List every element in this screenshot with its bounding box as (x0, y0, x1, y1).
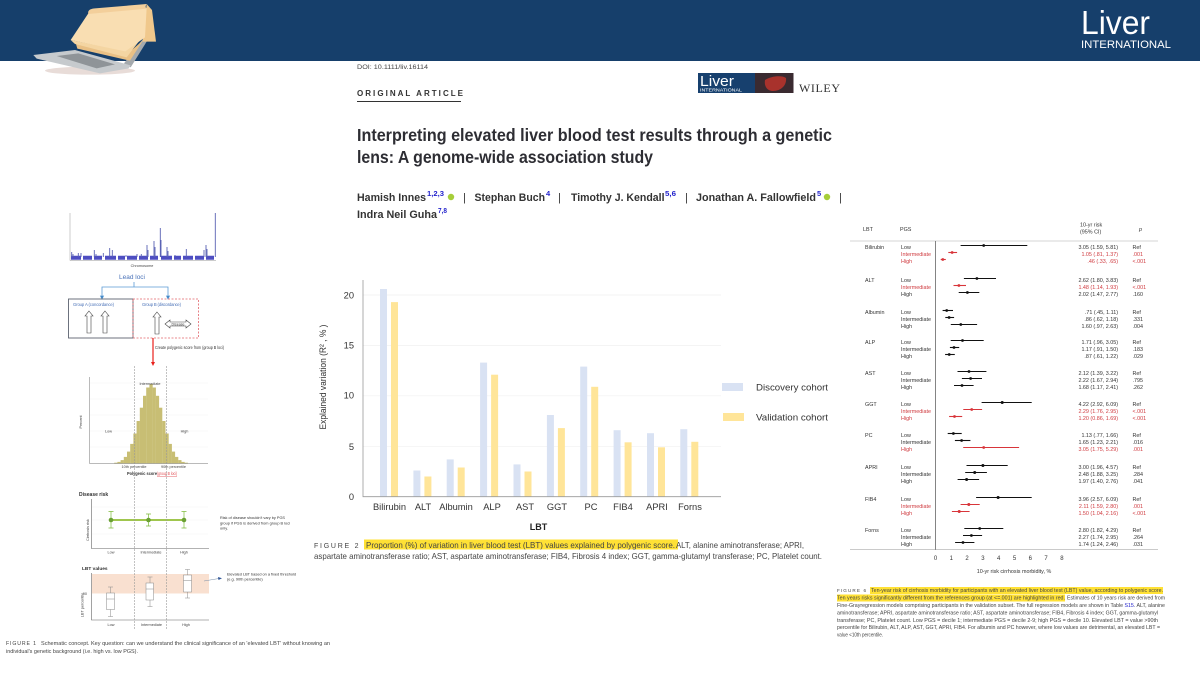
group: ALP: Low (901, 340, 911, 346)
group: Bilirubin: 3.05 (1.59, 5.81) (1078, 245, 1118, 251)
y axis title: Explained variation (R² , % ) (318, 324, 329, 430)
box: group B discordance (133, 299, 198, 338)
table header (863, 222, 1142, 236)
group: ALP: .183 (1132, 347, 1143, 353)
chart: manhattan plot (70, 213, 216, 268)
group: APRI: APRI (865, 465, 878, 471)
forest plot x axis: 5 (1013, 556, 1017, 562)
chart: polygenic score histogram: Low (105, 430, 112, 434)
chart: disease risk: Intermediate (140, 550, 162, 554)
caption: figure 2: Proportion (%) of variation in liver blood test (LBT) values explained by polygenic score. (366, 540, 675, 550)
group: Albumin: .71 (.45, 1.11) (1085, 310, 1118, 316)
caption: figure 2: aspartate aminotransferase ratio; AST, aspartate aminotransferase; FIB4, Fibrosis 4 index; GGT, gamma-glutamyl transferase; PC, Platelet count. (314, 551, 822, 561)
forest plot x axis: 3 (981, 556, 985, 562)
forest plot x axis: 10-yr risk cirrhosis morbidity, % (977, 569, 1051, 575)
caption: figure 1: individual's genetic background (i.e. high vs. low PGS). (6, 649, 138, 655)
title (357, 125, 832, 167)
table header: p (1138, 227, 1142, 233)
group: Albumin: Low (901, 310, 911, 316)
chart: LBT values boxplots: LBT values (82, 566, 108, 572)
group: ALT: High (901, 292, 912, 298)
group: PC (865, 432, 1143, 453)
chart: polygenic score histogram: (group B loci) (157, 471, 177, 476)
group: PC: 3.05 (1.75, 5.29) (1078, 447, 1118, 453)
caption: figure 1: FIGURE 1 (6, 641, 36, 647)
group: Bilirubin: .46 (.33, .65) (1087, 259, 1118, 265)
logo: Liver International (1081, 4, 1171, 51)
group: ALT: Ref (1132, 278, 1141, 284)
x axis labels: APRI (646, 502, 668, 512)
caption: figure 1 (6, 641, 330, 655)
chart: disease risk: Disease risk (79, 492, 108, 498)
authors: | (463, 192, 466, 204)
caption: figure 2: FIGURE 2 (314, 543, 359, 550)
authors: Stephan Buch (474, 192, 545, 204)
group: ALP: 1.17 (.91, 1.50) (1081, 347, 1118, 353)
title: lens: A genome-wide association study (357, 147, 653, 167)
x axis labels: FIB4 (613, 502, 633, 512)
arrow: create polygenic score (151, 338, 225, 366)
group: ALT: Intermediate (901, 285, 931, 291)
authors: Jonathan A. Fallowfield (696, 192, 816, 204)
authors: | (558, 192, 561, 204)
authors: 5,6 (665, 189, 676, 198)
group: PC: PC (865, 433, 873, 439)
table header: LBT (863, 227, 874, 233)
group: Albumin: Intermediate (901, 317, 931, 323)
group: Bilirubin: Ref (1132, 245, 1141, 251)
group: GGT: Ref (1132, 402, 1141, 408)
chart: disease risk: High (180, 550, 188, 554)
caption: figure 6: percentile for Bilirubin, ALT, ALP, AST, GGT, APRI, FIB4. For albumin and PC however, where low values are detrimental, an elevated LBT = (837, 625, 1160, 631)
legend: Validation cohort (756, 412, 828, 424)
caption: figure 6: Ten-year risk of cirrhosis morbidity for participants with an elevated liver blood test (LBT) value, according to polygenic score. (871, 588, 1163, 594)
group: Bilirubin: Intermediate (901, 252, 931, 258)
caption: figure 6: FIGURE 6 (837, 588, 866, 593)
box: group B discordance: Disease (172, 322, 184, 326)
group: Bilirubin: 1.05 (.81, 1.37) (1081, 252, 1118, 258)
group: PC: Low (901, 433, 911, 439)
journal logo banner: Liver (700, 74, 734, 90)
group: ALP: .029 (1132, 354, 1143, 360)
caption: figure 6: aminotransferase; APRI, aspartate aminotransferase ratio; AST, aspartate aminotransferase; FIB4, Fibrosis 4 index; GGT, gamma-glutamyl (837, 610, 1158, 616)
group: Forns: .031 (1132, 542, 1143, 548)
group: APRI: Intermediate (901, 472, 931, 478)
group: FIB4: Intermediate (901, 504, 931, 510)
authors: Indra Neil Guha (357, 209, 438, 221)
forest plot x axis: 6 (1029, 556, 1033, 562)
chart: polygenic score histogram: 90th percentile (161, 465, 186, 469)
x axis labels: Albumin (439, 502, 473, 512)
group: ALP: 1.71 (.96, 3.05) (1081, 340, 1118, 346)
group: PC: High (901, 447, 912, 453)
panel: figure 1 schematic (68, 213, 296, 630)
caption: figure 6: Ten years risks significantly different from the references group (at <=.001) are highlighted in red. (837, 596, 1065, 602)
group: Forns: 2.27 (1.74, 2.95) (1078, 535, 1118, 541)
authors: 4 (546, 189, 551, 198)
y axis labels: 10 (344, 390, 354, 400)
caption: figure 6: value <10th percentile. (837, 632, 883, 638)
legend (722, 382, 828, 424)
chart: polygenic score histogram: Intermediate (139, 382, 161, 386)
chart: polygenic score histogram: Polygenic score (127, 471, 158, 476)
journal logo banner: INTERNATIONAL (700, 88, 743, 92)
note: elevated LBT (227, 572, 296, 582)
group: Forns (865, 527, 1143, 548)
group: ALP: High (901, 354, 912, 360)
table header: (95% CI) (1080, 230, 1101, 236)
group: GGT (865, 401, 1146, 422)
chart: LBT values boxplots: Low (108, 623, 115, 627)
section label: original article (357, 89, 464, 102)
group: FIB4: 2.11 (1.59, 2.80) (1079, 504, 1118, 510)
percentile divider lines (134, 366, 166, 630)
logo: Liver International: Liver (1081, 4, 1150, 41)
x axis labels: Bilirubin (373, 502, 406, 512)
caption: figure 2 (314, 540, 822, 561)
table header: 10-yr risk (1080, 222, 1102, 228)
group: GGT: Low (901, 402, 911, 408)
group: ALP: .87 (.61, 1.22) (1084, 354, 1118, 360)
label: lead loci: Lead loci (119, 274, 145, 281)
forest plot x axis: 4 (997, 556, 1001, 562)
bars: discovery cohort (380, 289, 687, 497)
group: ALT: 2.62 (1.80, 3.83) (1078, 278, 1118, 284)
group: Bilirubin: Low (901, 245, 911, 251)
chart: polygenic score histogram (79, 377, 208, 476)
chart: polygenic score histogram: Percent (79, 415, 83, 429)
group: AST: High (901, 385, 912, 391)
chart: LBT values boxplots (80, 566, 209, 627)
arrow: elevated LBT callout (204, 577, 222, 581)
chart: explained variation bar chart (318, 280, 721, 532)
x axis labels: ALT (415, 502, 431, 512)
group: APRI: .284 (1132, 472, 1143, 478)
group: APRI: 3.00 (1.96, 4.57) (1078, 465, 1118, 471)
chart: polygenic score histogram: 10th percentile (122, 465, 146, 469)
group: ALP: ALP (865, 340, 876, 346)
group: ALP: Intermediate (901, 347, 931, 353)
group: ALT (865, 277, 1146, 298)
bars: validation cohort (391, 302, 698, 497)
group: Albumin: .86 (.62, 1.18) (1084, 317, 1118, 323)
note: disease risk (220, 515, 290, 530)
group: FIB4: Low (901, 497, 911, 503)
y axis labels: 15 (344, 340, 354, 350)
forest plot x axis: 7 (1044, 556, 1048, 562)
caption: figure 6 (837, 587, 1165, 638)
group: AST: Intermediate (901, 378, 931, 384)
group: GGT: Intermediate (901, 409, 931, 415)
group: GGT: <.001 (1132, 409, 1146, 415)
group: AST: 2.12 (1.39, 3.22) (1078, 371, 1118, 377)
box: group A concordance (68, 299, 133, 338)
group: Bilirubin: .001 (1132, 252, 1143, 258)
chart: disease risk (79, 492, 209, 554)
arrow: lead loci split (100, 282, 170, 299)
group: APRI: High (901, 479, 912, 485)
group: AST: Low (901, 371, 911, 377)
group: APRI: .041 (1132, 479, 1143, 485)
note: elevated LBT: (e.g. 90th percentile) (227, 576, 263, 582)
authors (357, 189, 842, 221)
y axis labels: 20 (344, 290, 354, 300)
group: PC: Ref (1132, 433, 1141, 439)
group: Bilirubin: <.001 (1132, 259, 1146, 265)
group: FIB4: FIB4 (865, 497, 876, 503)
y axis labels (344, 290, 354, 502)
authors: Hamish Innes (357, 192, 426, 204)
group: PC: Intermediate (901, 440, 931, 446)
caption: figure 2: ALT, alanine aminotransferase; APRI, (676, 540, 804, 550)
group: APRI: 1.97 (1.40, 2.76) (1078, 479, 1118, 485)
y axis labels: 5 (349, 442, 354, 452)
authors: 5 (817, 189, 821, 198)
note: elevated LBT: Elevated LBT based on a fixed threshold (227, 572, 296, 576)
y axis labels: 0 (349, 492, 354, 502)
authors: Timothy J. Kendall (571, 192, 664, 204)
caption: figure 6: Fine-Grayregression models comprising participants in the validation subset. The full regression models are shown in Table S15. ALT, alanine (837, 603, 1165, 609)
logo: Liver International: INTERNATIONAL (1081, 39, 1171, 51)
group: GGT: High (901, 416, 912, 422)
forest plot x axis: 2 (965, 556, 969, 562)
chart: forest plot of cirrhosis risk (850, 222, 1158, 575)
group: Bilirubin: High (901, 259, 912, 265)
chart: manhattan plot: Chromosome (131, 264, 153, 268)
forest plot x axis: 0 (934, 556, 938, 562)
authors: 1,2,3 (427, 189, 444, 198)
box: group A concordance: Group A (concordance) (73, 302, 115, 307)
x axis title: LBT (530, 522, 548, 532)
authors: | (839, 192, 842, 204)
group: FIB4: Ref (1132, 497, 1141, 503)
icon: laptop with paper pages (33, 4, 156, 75)
section label: original article: ORIGINAL ARTICLE (357, 89, 464, 98)
note: disease risk: only. (220, 526, 228, 530)
arrow: create polygenic score: Create polygenic score from (group B loci) (155, 345, 225, 350)
group: APRI: 2.48 (1.88, 3.25) (1078, 472, 1118, 478)
caption: figure 6: Estimates of 10 years risk are derived from (1067, 596, 1165, 602)
note: disease risk: group if PGS is derived from group B loci (220, 520, 290, 526)
group: AST: .795 (1132, 378, 1143, 384)
group: Albumin (865, 309, 1143, 330)
header band (0, 0, 1200, 61)
group: FIB4: .001 (1132, 504, 1143, 510)
group: Albumin: Albumin (865, 310, 884, 316)
group: GGT: 1.20 (0.86, 1.69) (1078, 416, 1118, 422)
group: GGT: GGT (865, 402, 877, 408)
group: AST: 2.22 (1.67, 2.94) (1078, 378, 1118, 384)
group: Forns: Intermediate (901, 535, 931, 541)
chart: LBT values boxplots: High (182, 623, 190, 627)
forest plot x axis: 1 (950, 556, 954, 562)
group: ALT: .160 (1132, 292, 1143, 298)
group: AST: AST (865, 371, 876, 377)
chart: disease risk: Cirrhosis risk (86, 519, 90, 541)
group: Albumin: 1.60 (.97, 2.63) (1081, 324, 1118, 330)
group: FIB4 (865, 496, 1146, 517)
chart: disease risk: Low (108, 550, 115, 554)
group: FIB4: <.001 (1132, 511, 1146, 517)
group: Bilirubin: Bilirubin (865, 245, 884, 251)
legend: Discovery cohort (756, 382, 828, 394)
table header: PGS (900, 227, 912, 233)
group: ALP (865, 339, 1143, 360)
group: GGT: 4.22 (2.92, 6.09) (1078, 402, 1118, 408)
journal logo banner (698, 73, 794, 93)
authors: | (685, 192, 688, 204)
group: AST (865, 370, 1143, 391)
group: FIB4: High (901, 511, 912, 517)
group: PC: .016 (1132, 440, 1143, 446)
forest plot x axis (934, 556, 1064, 575)
group: Forns: .264 (1132, 535, 1143, 541)
group: APRI (865, 464, 1143, 485)
group: ALT: 1.48 (1.14, 1.93) (1078, 285, 1118, 291)
group: FIB4: 3.96 (2.57, 6.09) (1078, 497, 1118, 503)
group: Forns: Low (901, 528, 911, 534)
group: GGT: 2.29 (1.76, 2.95) (1078, 409, 1118, 415)
group: PC: 1.65 (1.23, 2.21) (1078, 440, 1118, 446)
chart: polygenic score histogram: High (181, 430, 188, 434)
group: Forns: 2.80 (1.82, 4.29) (1078, 528, 1118, 534)
authors: 7,8 (438, 206, 447, 215)
note: disease risk: Risk of disease shouldn't vary by PGS (220, 515, 285, 520)
group: AST: Ref (1132, 371, 1141, 377)
publisher name: WILEY (799, 81, 840, 95)
chart: LBT values boxplots: LBT percentile (80, 593, 84, 617)
DOI: DOI: 10.1111/liv.16114 (357, 64, 428, 71)
group: GGT: <.001 (1132, 416, 1146, 422)
group: AST: 1.68 (1.17, 2.41) (1078, 385, 1118, 391)
box: group B discordance: Group B (discordance) (142, 302, 182, 307)
chart: LBT values boxplots: Intermediate (141, 623, 162, 627)
group: Albumin: Ref (1132, 310, 1141, 316)
group: Bilirubin (865, 244, 1146, 265)
title: Interpreting elevated liver blood test results through a genetic (357, 125, 832, 145)
group: AST: .262 (1132, 385, 1143, 391)
group: APRI: Ref (1132, 465, 1141, 471)
group: ALP: Ref (1132, 340, 1141, 346)
forest plot x axis: 8 (1060, 556, 1064, 562)
group: ALT: ALT (865, 278, 875, 284)
group: APRI: Low (901, 465, 911, 471)
group: PC: .001 (1132, 447, 1143, 453)
x axis labels: GGT (547, 502, 567, 512)
group: ALT: 2.02 (1.47, 2.77) (1078, 292, 1118, 298)
group: Albumin: .331 (1132, 317, 1143, 323)
x axis labels: Forns (678, 502, 702, 512)
group: Forns: Forns (865, 528, 879, 534)
group: Forns: High (901, 542, 912, 548)
group: ALT: Low (901, 278, 911, 284)
group: Albumin: .004 (1132, 324, 1143, 330)
group: ALT: <.001 (1132, 285, 1146, 291)
group: PC: 1.13 (.77, 1.66) (1081, 433, 1118, 439)
group: Forns: Ref (1132, 528, 1141, 534)
chart: LBT values boxplots: 90 (83, 592, 87, 596)
x axis labels: AST (516, 502, 534, 512)
caption: figure 1: Schematic concept. Key question: can we understand the clinical significance of an 'elevated LBT' without knowing an (41, 641, 330, 647)
x axis labels (373, 502, 702, 512)
x axis labels: PC (585, 502, 598, 512)
group: Forns: 1.74 (1.24, 2.46) (1078, 542, 1118, 548)
group: FIB4: 1.50 (1.04, 2.16) (1078, 511, 1118, 517)
group: Albumin: High (901, 324, 912, 330)
x axis labels: ALP (483, 502, 501, 512)
caption: figure 6: transferase; PC, Platelet count. Low PGS = decile 1; intermediate PGS = decile 2-9; high PGS = decile 10. Elevated LBT = value >90th (837, 618, 1158, 624)
